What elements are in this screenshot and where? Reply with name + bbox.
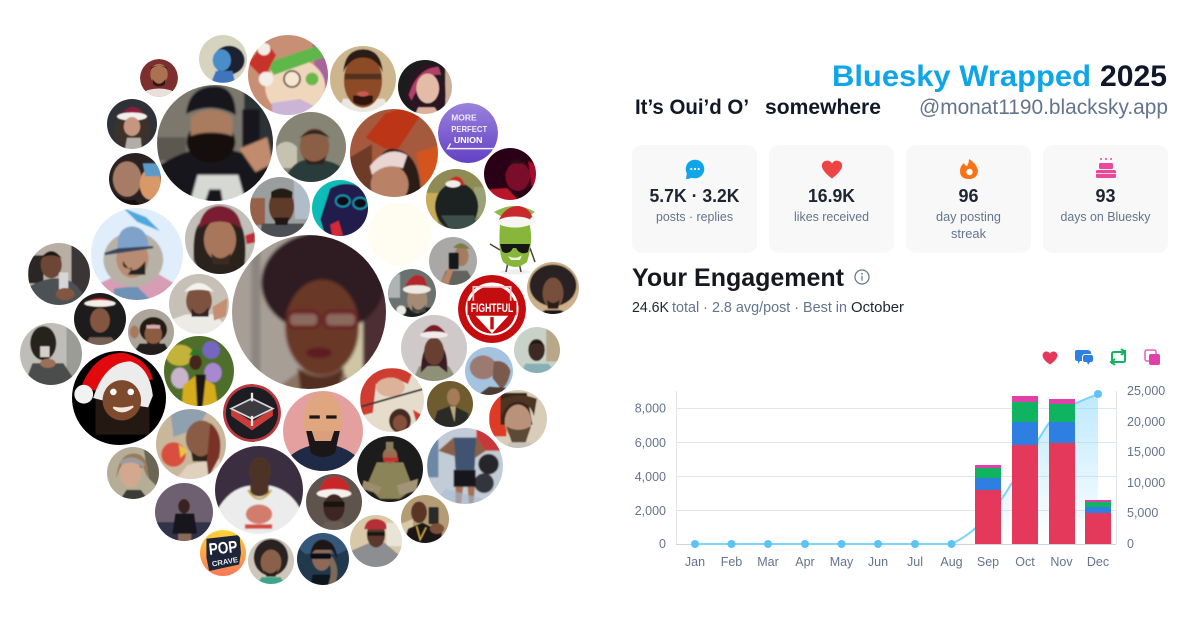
- heading: your engagement: Your Engagement: [632, 264, 845, 292]
- avatar: woman kissing plush: [109, 153, 161, 205]
- left axis labels: 6,000: [635, 436, 666, 450]
- month labels: Mar: [757, 555, 779, 569]
- avatar: woman with headband: [104, 444, 162, 502]
- stat card: day posting streak: [906, 145, 1031, 253]
- display name: somewhere: [765, 96, 881, 119]
- avatar: woman with big hair and santa hat in shop: [426, 169, 486, 229]
- avatar: video game man in white tee: [211, 442, 307, 538]
- right axis labels: 0: [1127, 537, 1134, 551]
- icon: replies bubbles: [1075, 350, 1093, 365]
- left axis labels: [635, 402, 666, 551]
- avatar: Pop Crave logo: [198, 528, 248, 578]
- avatar: woman in santa hat, dark hair: [74, 293, 126, 345]
- engagement summary: total · 2.8 avg/post · Best in: [672, 300, 847, 316]
- avatar: man waving with headband: [128, 309, 174, 355]
- avatar: cartoon man on maroon: [140, 59, 178, 97]
- avatar: pale cream blank circle: [368, 202, 432, 266]
- cumulative area: [952, 394, 1098, 544]
- month labels: Feb: [721, 555, 742, 569]
- stat card: likes received: [769, 145, 894, 253]
- avatar: person with red antlers: [350, 109, 438, 197]
- avatar: green mango mascot with santa hat: [490, 206, 536, 274]
- avatar: gym photo man: [423, 424, 507, 508]
- month labels: Apr: [795, 555, 815, 569]
- avatar: person with curly hair and phone: [20, 323, 82, 385]
- stat card: likes received: likes received: [794, 209, 869, 224]
- avatar: woman with pink streaked hair: [398, 60, 452, 114]
- stacked bar: Nov: [1049, 399, 1075, 544]
- stat card: day posting streak: 96: [958, 186, 978, 206]
- left axis labels: 8,000: [635, 402, 666, 416]
- month labels: Oct: [1015, 555, 1035, 569]
- stat card: days on Bluesky: [1043, 145, 1168, 253]
- title: 2025: [1100, 60, 1167, 93]
- engagement summary: October: [851, 300, 904, 316]
- stat card: day posting streak: day posting: [936, 209, 1001, 224]
- cumulative line: [695, 394, 1098, 544]
- right axis labels: 25,000: [1127, 384, 1165, 398]
- month labels: Dec: [1087, 555, 1109, 569]
- avatar bubble cluster: [17, 31, 582, 588]
- avatar: Fightful red logo: [458, 275, 526, 343]
- handle: @monat1190.blacksky.app: [919, 96, 1168, 119]
- avatar: man with mirror selfie: [28, 243, 90, 305]
- stat card: posts and replies: posts · replies: [656, 209, 733, 224]
- avatar: memoji in santa hat on black: [72, 351, 166, 445]
- month labels: Jul: [907, 555, 923, 569]
- left axis labels: 0: [659, 537, 666, 551]
- avatar: man in suit, dim room: [427, 381, 473, 427]
- avatar: central woman with afro and red glasses: [232, 235, 386, 389]
- title: Bluesky Wrapped: [832, 60, 1091, 93]
- month labels: Jan: [685, 555, 705, 569]
- month labels: May: [830, 555, 854, 569]
- month labels: Jun: [868, 555, 888, 569]
- avatar: man with phone in hand: [429, 237, 477, 285]
- avatar: woman in santa hat and khaki shirt: [401, 315, 467, 381]
- icon: reposts arrows: [1111, 349, 1125, 365]
- line data points: [691, 390, 1102, 548]
- month labels: Sep: [977, 555, 999, 569]
- right axis labels: 5,000: [1127, 506, 1158, 520]
- icon: speech bubble: [686, 160, 704, 179]
- right axis labels: 10,000: [1127, 476, 1165, 490]
- stat card: days on Bluesky: 93: [1096, 186, 1116, 206]
- avatar: man in striped shirt: [514, 327, 560, 373]
- avatar: bearded man with long hair: [489, 390, 547, 448]
- stat card: posts and replies: [632, 145, 757, 253]
- right axis labels: 20,000: [1127, 415, 1165, 429]
- legend icons: [1043, 349, 1160, 365]
- avatar: man with gold chain and phone: [399, 493, 451, 545]
- avatar: man in car with glasses: [276, 112, 346, 182]
- engagement chart: [635, 384, 1165, 569]
- gridlines: [676, 391, 1116, 544]
- avatar: man in santa hat and sunglasses: [303, 471, 365, 533]
- stacked bar: Dec: [1085, 500, 1111, 544]
- avatar: curly haired man in teal shirt: [246, 536, 296, 586]
- month labels: Aug: [940, 555, 963, 569]
- avatar: More Perfect Union logo: [438, 103, 498, 163]
- stat card: day posting streak: streak: [951, 226, 986, 241]
- engagement summary: [632, 300, 904, 316]
- stat card: days on Bluesky: days on Bluesky: [1060, 209, 1151, 224]
- avatar: sky and tree with face: [465, 347, 513, 395]
- icon: likes heart: [1043, 351, 1057, 364]
- avatar: illustrated bald man on pink: [283, 391, 363, 471]
- icon: quotes squares: [1145, 350, 1160, 365]
- avatar: woman against wall at night: [152, 480, 216, 545]
- avatar: wrestling ring logo: [223, 384, 281, 442]
- left axis labels: 4,000: [635, 470, 666, 484]
- avatar: woman in yellow with flowers: [164, 336, 234, 406]
- avatar: cartoon with santa hat: [248, 35, 328, 115]
- avatar: man with closed eyes, city backdrop: [250, 177, 310, 237]
- icon: heart: [822, 161, 842, 178]
- month labels: [685, 555, 1109, 569]
- icon: info: [855, 270, 869, 284]
- avatar: smiling man in white beanie: [169, 274, 229, 334]
- stat card: posts and replies: 5.7K · 3.2K: [650, 186, 740, 206]
- stat card: likes received: 16.9K: [808, 186, 855, 206]
- avatar: man in striped cap, pale blue sky: [91, 208, 183, 300]
- display name: [635, 96, 881, 119]
- right axis labels: [1127, 384, 1165, 551]
- avatar: cartoon Darth Vader on teal: [312, 180, 368, 236]
- avatar: red lit man: [484, 148, 536, 200]
- month labels: Nov: [1050, 555, 1073, 569]
- avatar: man with large curly hair: [527, 262, 579, 314]
- display name: It’s Oui’d O’: [635, 96, 749, 119]
- avatar: bearded man with red dreadlocks and drink: [152, 406, 230, 482]
- icon: flame: [960, 159, 978, 179]
- avatar: armored action figure: [354, 433, 426, 505]
- stacked bar: Sep: [975, 465, 1001, 544]
- avatar: woman in santa hat: [107, 99, 157, 149]
- engagement summary: 24.6K: [632, 300, 669, 316]
- avatar: bearded man with phone selfie: [157, 85, 273, 201]
- avatar: man in red cap and grey shirt: [347, 512, 405, 570]
- avatar: man in santa hat in car: [388, 269, 436, 317]
- avatar: man with glasses, tan background: [330, 46, 396, 112]
- avatar: santa photo with child: [360, 368, 424, 432]
- right axis labels: 15,000: [1127, 445, 1165, 459]
- avatar: woman in sunglasses in car: [294, 530, 352, 588]
- left axis labels: 2,000: [635, 504, 666, 518]
- stacked bar: Oct: [1012, 396, 1038, 544]
- avatar: blue horned character: [199, 35, 247, 83]
- avatar: man in maroon beanie: [185, 204, 255, 274]
- icon: birthday cake: [1096, 158, 1116, 178]
